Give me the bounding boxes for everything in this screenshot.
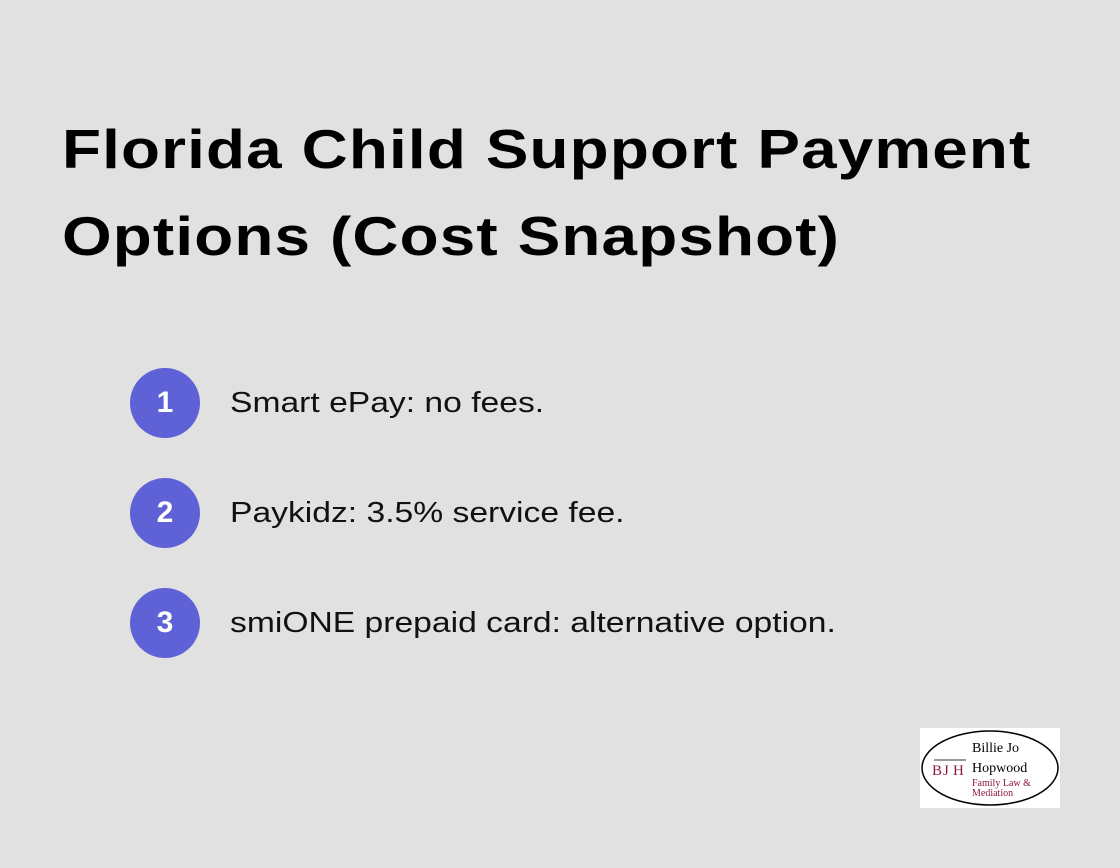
logo: H: [953, 763, 964, 779]
title: [62, 118, 1031, 267]
item 1: [130, 368, 544, 438]
item 2: Paykidz: 3.5% service fee.: [230, 497, 625, 529]
title: Florida Child Support Payment: [62, 118, 1031, 180]
item 1: Smart ePay: no fees.: [230, 387, 544, 419]
logo: Billie Jo: [972, 741, 1019, 756]
logo: B: [932, 763, 942, 779]
logo: J: [943, 763, 949, 779]
title: Options (Cost Snapshot): [62, 205, 840, 267]
number badge 2: [130, 478, 200, 548]
item 3: smiONE prepaid card: alternative option.: [230, 607, 836, 639]
logo: Hopwood: [972, 761, 1027, 776]
number badge 2: 2: [157, 496, 173, 529]
item 3: [130, 588, 836, 658]
number badge 1: 1: [157, 386, 173, 419]
item 2: [130, 478, 625, 548]
logo: Mediation: [972, 788, 1013, 799]
logo: [920, 728, 1060, 808]
number badge 1: [130, 368, 200, 438]
logo: Family Law &: [972, 778, 1031, 789]
number badge 3: 3: [157, 606, 173, 639]
number badge 3: [130, 588, 200, 658]
